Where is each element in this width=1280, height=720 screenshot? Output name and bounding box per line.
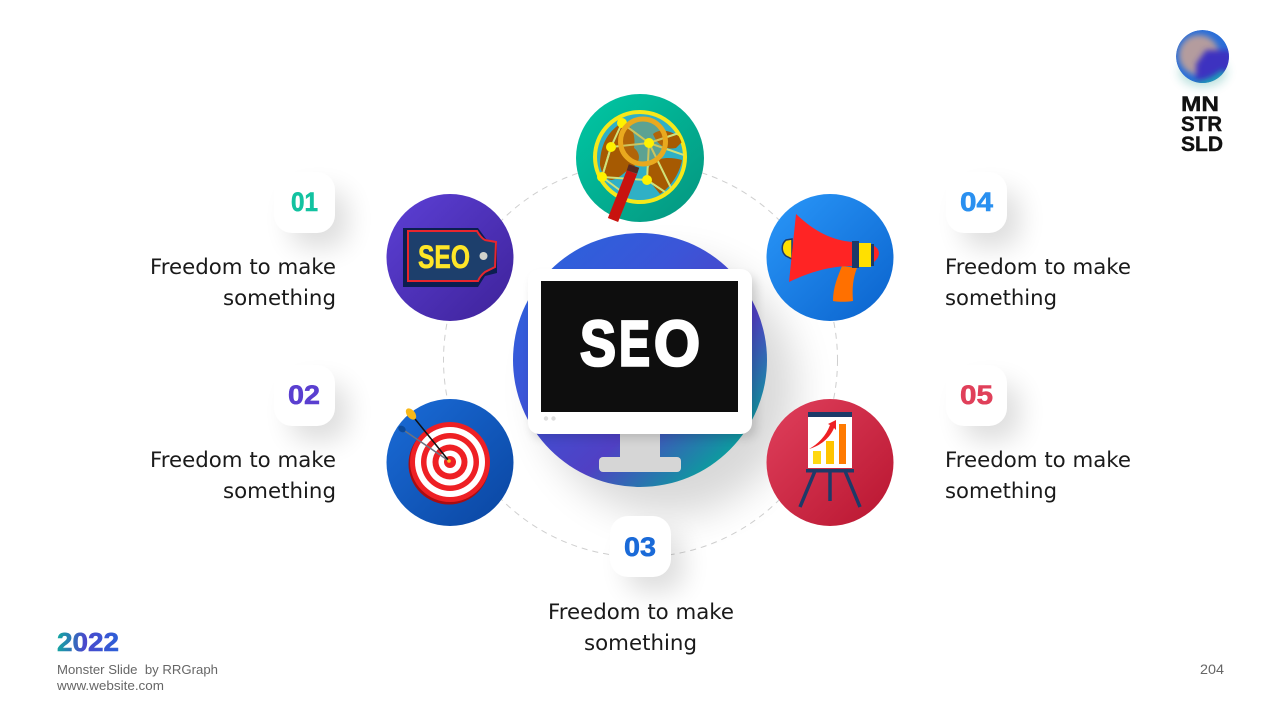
central SEO monitor on gradient circle (513, 233, 796, 516)
text 04: Freedom to make (945, 255, 1131, 279)
text 03: something (584, 631, 697, 655)
footer credit: Monster Slide by RRGraph (57, 662, 218, 677)
icon: megaphone (766, 194, 894, 321)
text 05 (945, 448, 1131, 503)
monitor buttons (544, 416, 556, 421)
footer credit (56, 662, 218, 693)
monitor screen (541, 281, 738, 412)
badge 02: 02 (288, 380, 320, 410)
text 03 (548, 600, 734, 655)
badge 05: 05 (960, 380, 993, 410)
text 02: something (223, 479, 336, 503)
text 04 (945, 255, 1131, 310)
tag face (408, 231, 496, 281)
globe (595, 112, 685, 202)
easel legs (800, 471, 860, 507)
badge 04 (946, 172, 1020, 248)
monitor text: O (654, 308, 700, 380)
item 03 (548, 516, 734, 655)
icon: presentation board with chart (766, 399, 894, 526)
logo sphere (1176, 30, 1229, 83)
monitor body (528, 269, 752, 434)
board (808, 416, 852, 468)
item 04 (945, 172, 1131, 310)
megaphone collar (852, 241, 879, 268)
logo text: SLD (1181, 133, 1223, 156)
badge 04: 04 (960, 187, 993, 217)
megaphone cone (789, 214, 852, 282)
magnifier handle (613, 166, 634, 220)
tag base (403, 228, 497, 287)
monitor shadow (532, 276, 756, 438)
icon: globe with magnifier (576, 94, 704, 222)
megaphone handle (833, 266, 857, 302)
monitor text (580, 308, 700, 380)
badge 01: 01 (291, 187, 318, 217)
magnifier lens (620, 119, 666, 164)
badge 02 (274, 365, 348, 441)
monitor text: E (619, 308, 650, 380)
text 01 (150, 255, 336, 310)
text 02 (150, 448, 336, 503)
monitor stand (599, 430, 681, 472)
logo (1176, 30, 1232, 156)
item 01 (150, 172, 348, 310)
badge 03 (610, 516, 684, 592)
blue arrow (397, 424, 449, 461)
yellow arrow (404, 406, 451, 463)
icon: SEO price tag (386, 194, 514, 321)
tag hole (480, 252, 488, 260)
badge 01 (274, 172, 348, 248)
logo text: MN (1181, 93, 1219, 116)
text 02: Freedom to make (150, 448, 336, 472)
icon: archery target (386, 399, 514, 526)
item 05 (945, 365, 1131, 503)
item 02 (150, 365, 348, 503)
text 01: Freedom to make (150, 255, 336, 279)
central circle shadow (540, 260, 796, 516)
text 05: something (945, 479, 1057, 503)
board top bar and tray (806, 412, 854, 472)
trend arrow (809, 420, 836, 449)
bar chart (813, 424, 846, 464)
logo glow (1179, 57, 1227, 87)
logo text (1181, 93, 1223, 156)
text 03: Freedom to make (548, 600, 734, 624)
text 05: Freedom to make (945, 448, 1131, 472)
target rings (408, 422, 490, 504)
badge 03: 03 (624, 532, 656, 562)
footer credit: www.website.com (56, 678, 164, 693)
tag label: SEO (418, 239, 470, 275)
logo text: STR (1181, 113, 1222, 136)
dashed ring connecting the icons (444, 163, 838, 557)
badge 05 (946, 365, 1020, 441)
central gradient circle (513, 233, 767, 487)
monitor text: S (580, 308, 616, 380)
footer year: 2022 (57, 627, 119, 657)
text 01: something (223, 286, 336, 310)
page number: 204 (1200, 661, 1224, 677)
text 04: something (945, 286, 1057, 310)
megaphone back (782, 239, 792, 259)
